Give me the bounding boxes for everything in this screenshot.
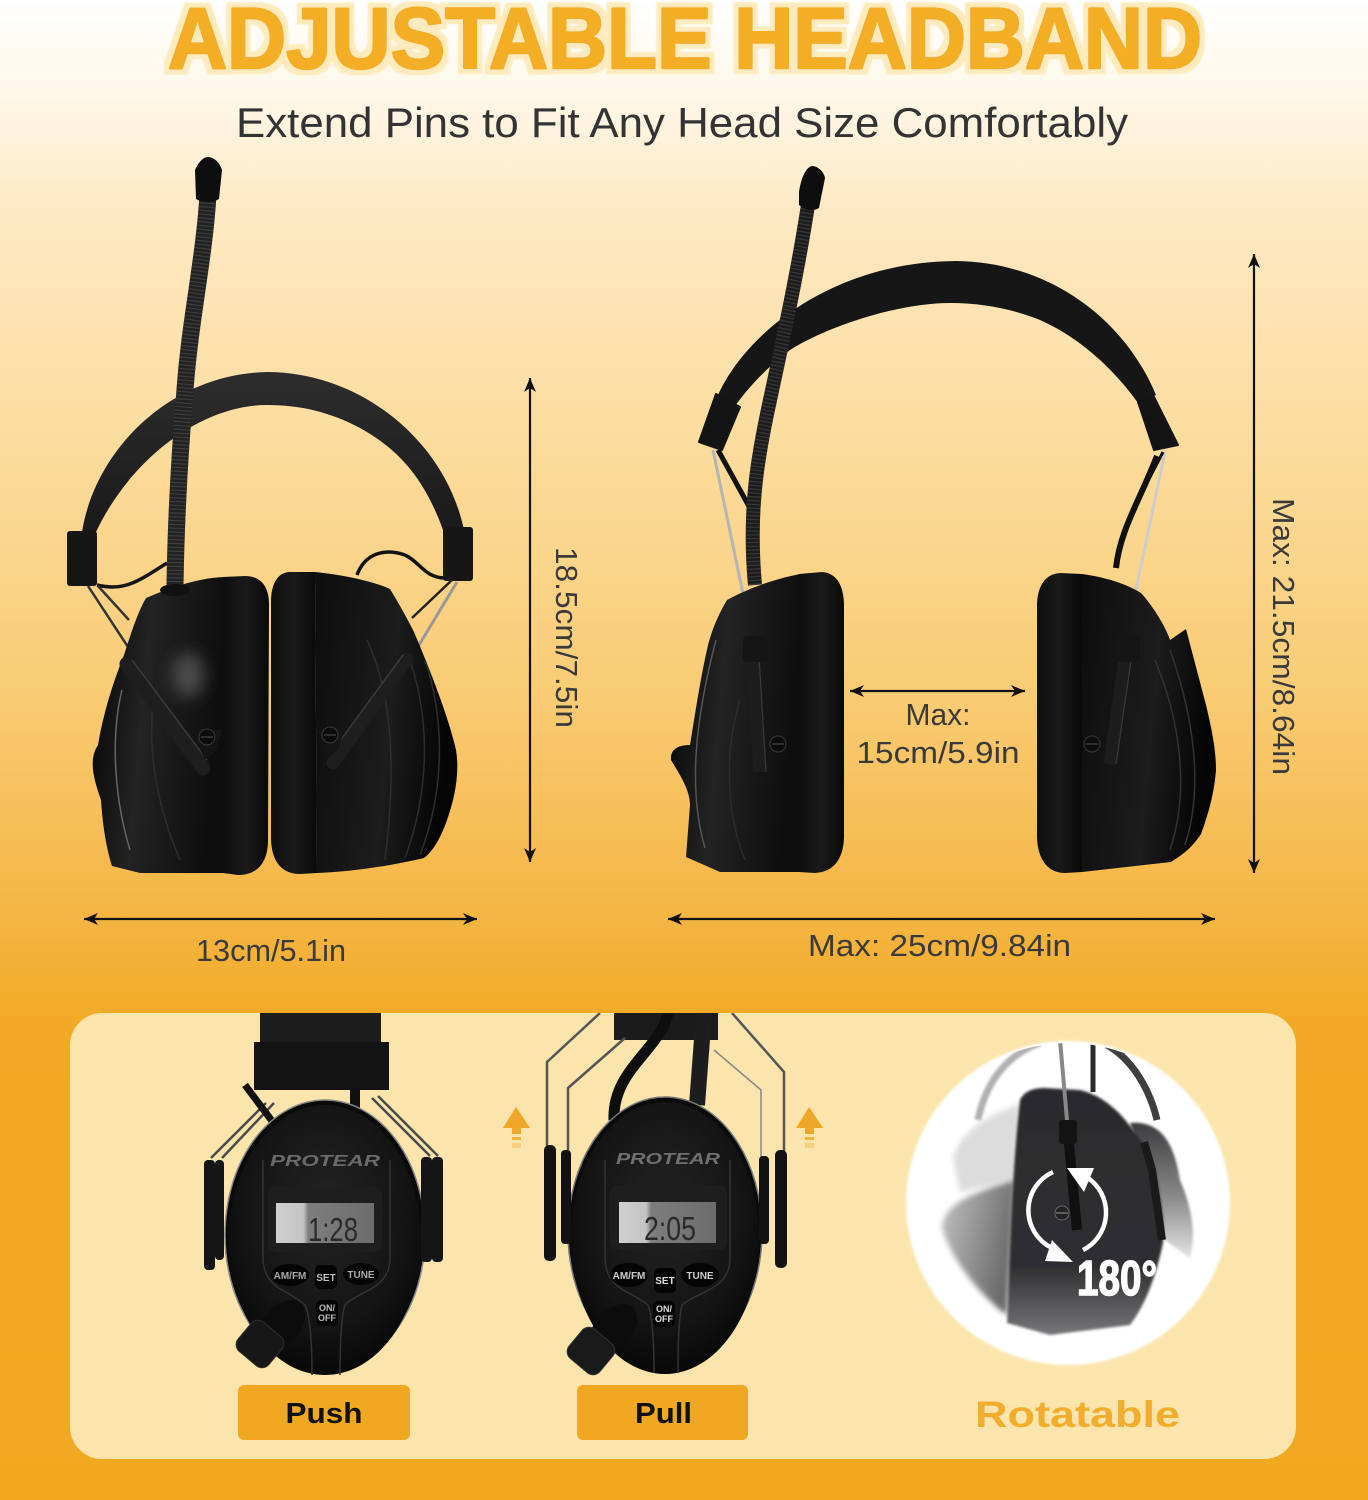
button AM/FM: AM/FM (613, 1271, 645, 1282)
wires (547, 1013, 784, 1158)
pivot left (190, 728, 222, 760)
arm left (127, 660, 207, 768)
lcd time: 2:05 (644, 1210, 696, 1247)
bottom panel (70, 1013, 1296, 1459)
panel contour (605, 1160, 730, 1373)
button ON/OFF: OFF (655, 1314, 673, 1324)
pivot right (318, 727, 345, 758)
volume knob (566, 1304, 637, 1376)
push earmuff (204, 1013, 443, 1375)
lcd screen (276, 1203, 374, 1243)
cup back rim (568, 1096, 762, 1316)
right headset: extended (671, 166, 1216, 873)
volume knob (236, 1300, 305, 1368)
black cable (614, 1013, 668, 1120)
label: value: 15cm/5.9in (856, 735, 1020, 770)
button AM/FM (271, 1264, 309, 1286)
arrow (1253, 254, 1255, 873)
dimension: inner gap (850, 691, 1025, 770)
lcd time: 1:28 (308, 1211, 358, 1248)
arm right (329, 655, 407, 763)
arm collar right (1115, 636, 1140, 662)
right cushion (271, 572, 317, 874)
arrow (668, 918, 1215, 920)
antenna stub (697, 1013, 704, 1105)
180 degrees label: 180° (1077, 1252, 1157, 1306)
label: Max: 25cm/9.84in (808, 928, 1071, 963)
arm rods left (544, 1145, 571, 1261)
arrow (850, 690, 1025, 692)
pull label (577, 1385, 748, 1440)
left cushion (223, 576, 269, 875)
button SET: SET (655, 1276, 675, 1287)
clip left (699, 394, 740, 450)
rotation image (906, 1040, 1230, 1365)
wires (211, 1085, 438, 1158)
button SET: SET (316, 1273, 336, 1284)
arm right (1110, 640, 1134, 764)
right cushion (1037, 573, 1082, 873)
push label (238, 1385, 410, 1440)
button TUNE: TUNE (347, 1270, 375, 1281)
button SET (315, 1265, 337, 1289)
button ON/OFF (653, 1301, 675, 1327)
button ON/OFF: ON/ (319, 1303, 335, 1313)
rotation arrows (1028, 1172, 1106, 1250)
button AM/FM (610, 1263, 648, 1287)
cup back rim (224, 1099, 424, 1335)
antenna (753, 166, 825, 585)
arrowheads (1045, 1168, 1094, 1262)
earmuff ghost views (942, 1040, 1193, 1335)
left cushion (799, 572, 844, 873)
lcd bezel (268, 1187, 382, 1252)
right earcup shell (315, 572, 457, 873)
lcd screen (619, 1202, 716, 1243)
rotatable label: Rotatable (975, 1394, 1180, 1435)
arm rods left (204, 1160, 224, 1270)
cable and wires (88, 552, 457, 655)
button ON/OFF: ON/ (656, 1304, 672, 1314)
lcd bezel (610, 1185, 727, 1250)
clip right (1138, 395, 1178, 450)
button ON/OFF (316, 1300, 338, 1326)
right earcup shell (1082, 574, 1216, 872)
arrow (529, 378, 531, 862)
arrow (84, 918, 477, 920)
button ON/OFF: OFF (318, 1313, 336, 1323)
antenna (160, 157, 222, 596)
button TUNE (343, 1263, 379, 1285)
contour lines (695, 640, 1195, 860)
logo: PROTEAR (270, 1153, 381, 1170)
icon: up arrow right (796, 1107, 823, 1148)
arm rods right (759, 1150, 787, 1268)
arm rods right (421, 1157, 443, 1262)
cup face (571, 1102, 759, 1374)
label: max: Max: (906, 697, 970, 732)
pivot left (770, 736, 786, 752)
left headset: folded, compact (67, 157, 473, 875)
logo: PROTEAR (616, 1151, 721, 1168)
shell highlight (172, 653, 204, 697)
icon: up arrow left (503, 1107, 530, 1148)
button TUNE: TUNE (686, 1271, 714, 1282)
white circle (906, 1041, 1230, 1365)
label: 18.5cm/7.5in (549, 547, 584, 728)
pull earmuff (544, 1013, 787, 1378)
top block (614, 1013, 718, 1040)
clip right (443, 527, 473, 581)
panel background (70, 1013, 1296, 1459)
pull label: Pull (635, 1398, 692, 1430)
label: Max: 21.5cm/8.64in (1266, 498, 1301, 775)
arm left (752, 640, 766, 772)
headband (82, 372, 464, 532)
headband strap (260, 1013, 381, 1042)
button TUNE (681, 1263, 719, 1287)
left earcup shell (671, 574, 800, 872)
clip left (67, 531, 97, 586)
button AM/FM: AM/FM (274, 1271, 306, 1282)
arm collar left (743, 636, 767, 662)
slider block (254, 1042, 389, 1090)
cup face (238, 1105, 411, 1375)
shell contour lines (115, 640, 439, 860)
label: 13cm/5.1in (196, 933, 346, 968)
panel contour (263, 1160, 390, 1375)
headband (718, 261, 1156, 406)
button SET (654, 1268, 676, 1293)
pivot right (1084, 736, 1100, 752)
left earcup shell (93, 577, 224, 873)
push label: Push (286, 1398, 362, 1430)
wires and cables (713, 450, 1165, 632)
subtitle: Extend Pins to Fit Any Head Size Comfortably (236, 99, 1128, 146)
